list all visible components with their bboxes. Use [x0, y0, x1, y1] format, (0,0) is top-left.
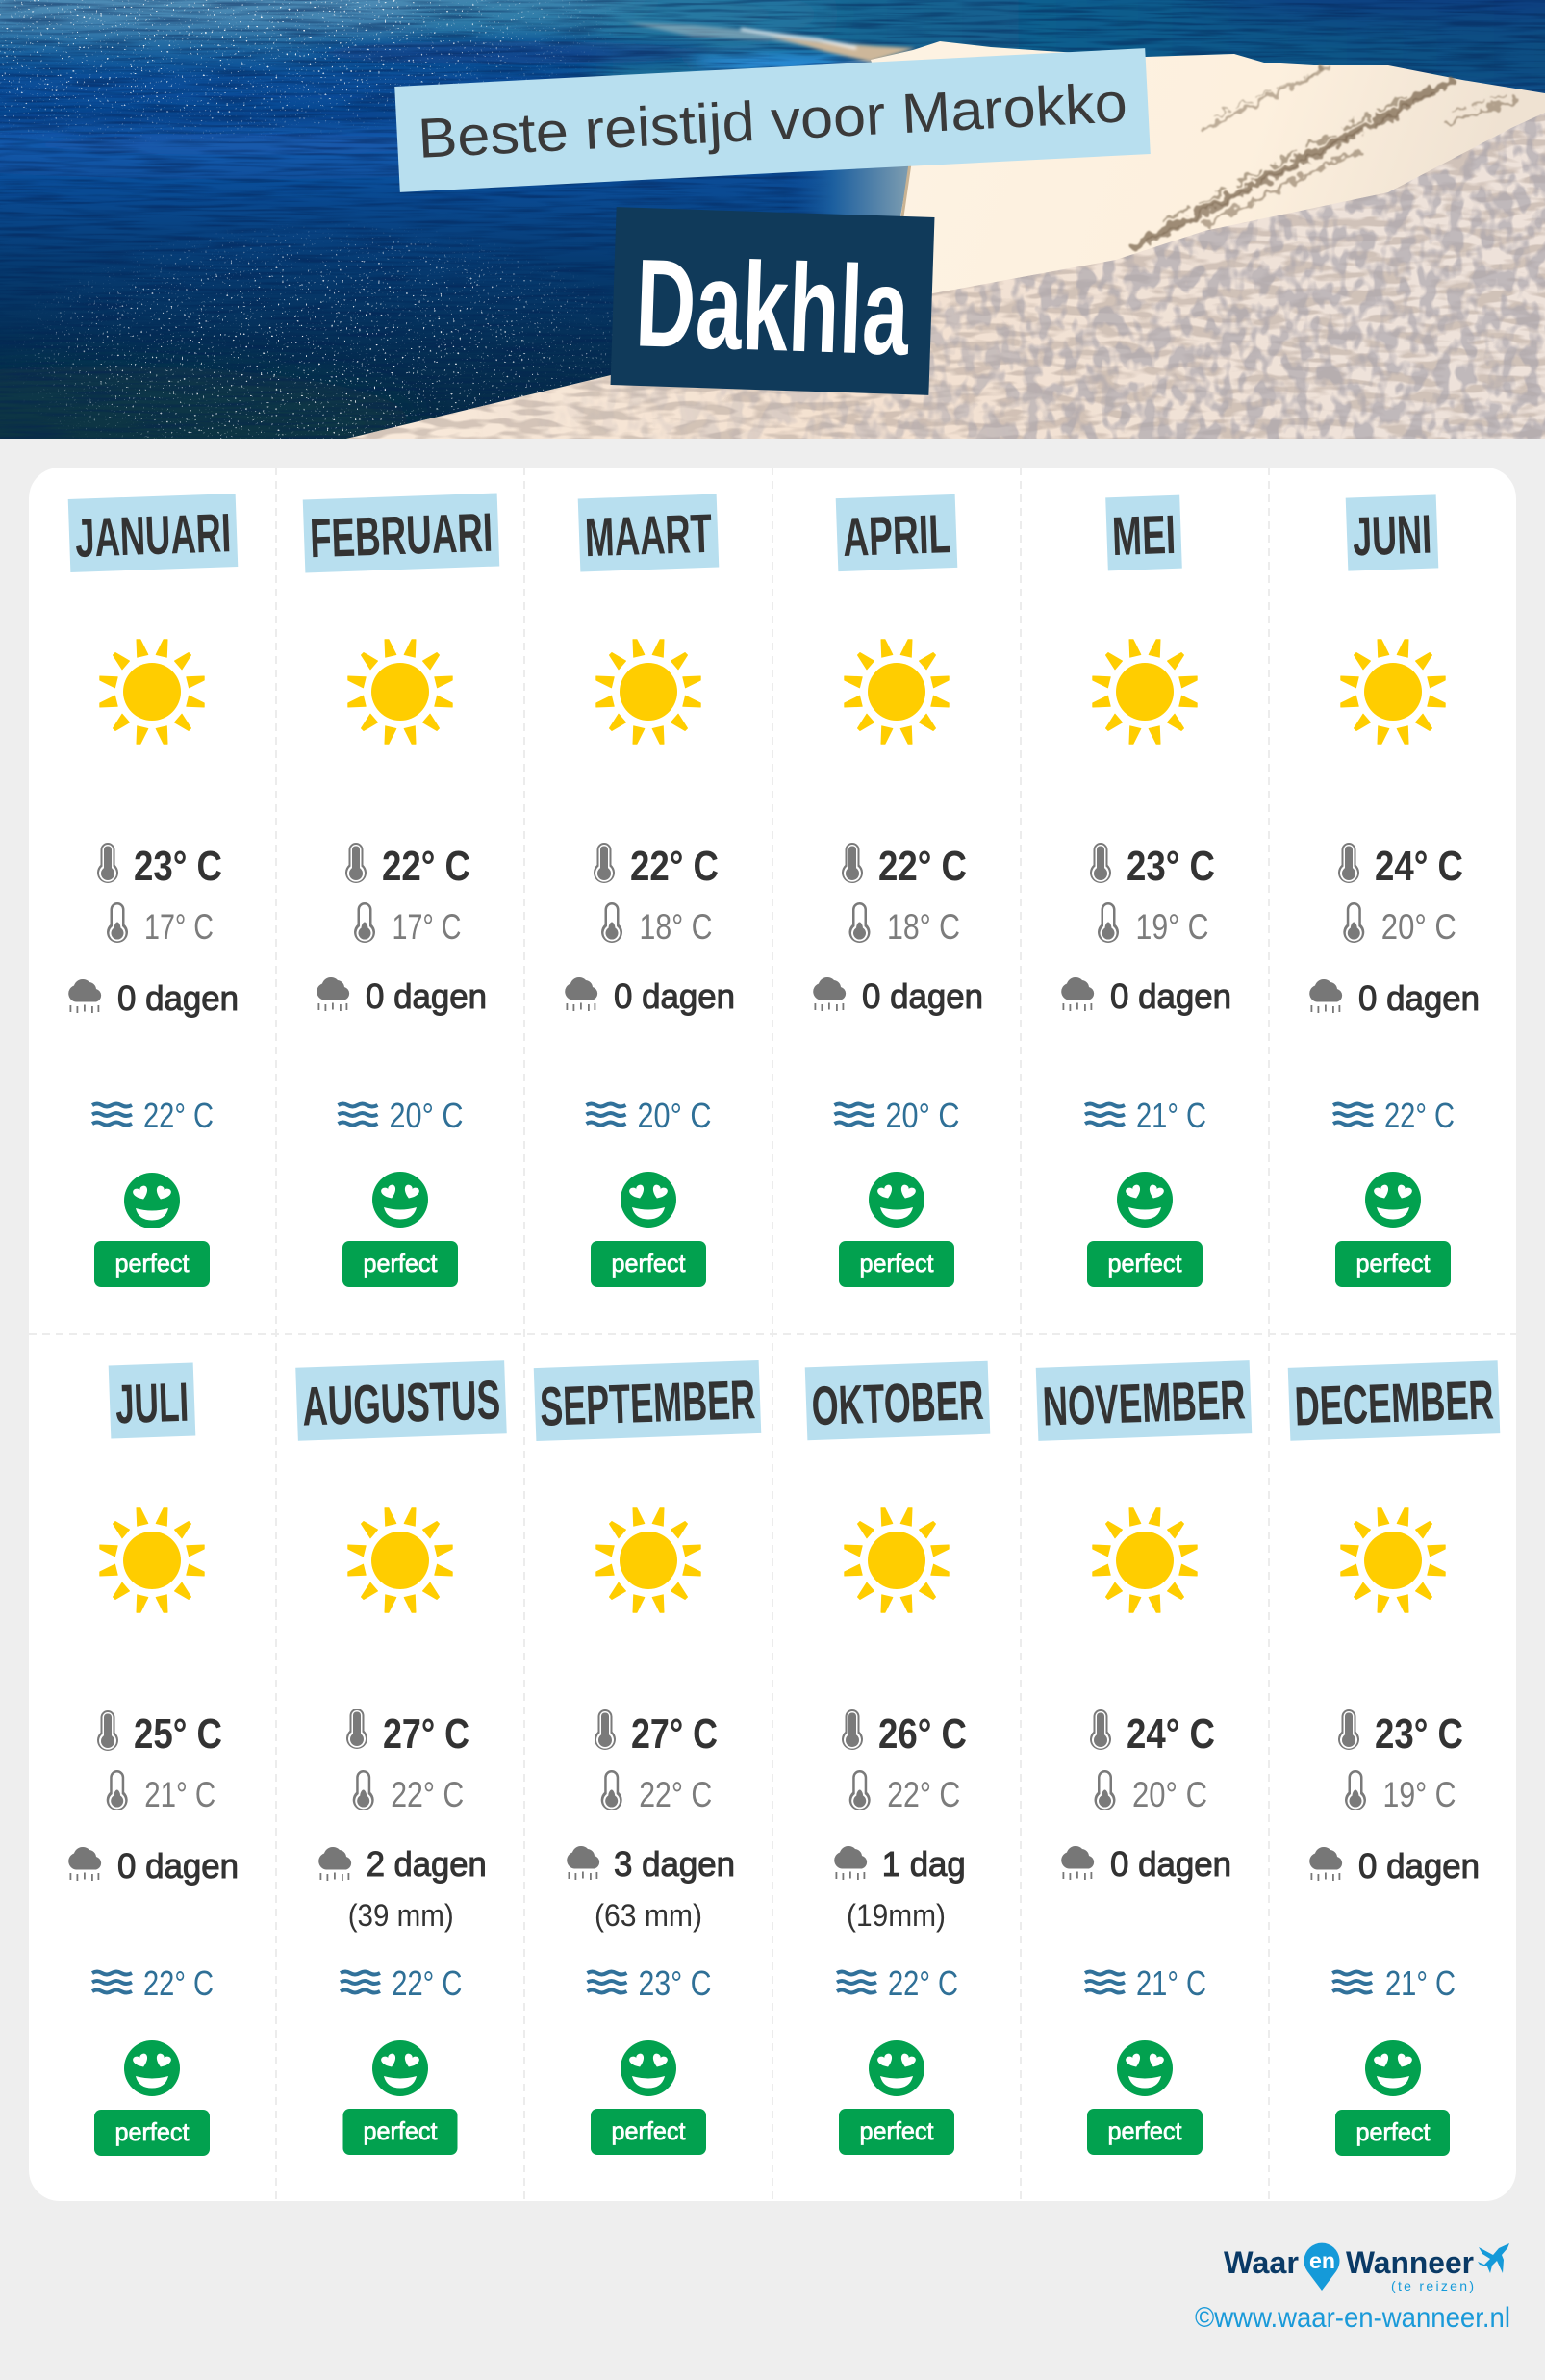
icon: sea water — [92, 1972, 132, 1993]
max temperature: 22° C — [382, 843, 470, 890]
sea temperature: 22° C — [1384, 1096, 1455, 1135]
min temperature: 18° C — [639, 907, 712, 947]
rating badge: perfect — [860, 1249, 934, 1278]
icon: min temperature — [1343, 902, 1364, 943]
rain days: 1 dag — [882, 1844, 966, 1884]
icon: rain — [68, 1847, 101, 1881]
icon: min temperature — [1095, 1770, 1116, 1810]
icon: rain — [1061, 977, 1094, 1011]
logo word: en: en — [1309, 2248, 1335, 2273]
max temperature: 25° C — [134, 1710, 222, 1758]
rain days: 0 dagen — [117, 1846, 239, 1886]
month: november — [1036, 1360, 1252, 2155]
icon: min temperature — [848, 902, 870, 943]
logo word: Wanneer: Wanneer — [1346, 2245, 1474, 2280]
month label: MEI — [1111, 504, 1177, 568]
city title: Dakhla: Dakhla — [633, 232, 912, 382]
rainfall amount: (39 mm) — [348, 1898, 454, 1933]
icon: smiley — [869, 2040, 924, 2096]
min temperature: 22° C — [887, 1775, 960, 1814]
icon: max temperature — [842, 843, 863, 883]
month: maart — [565, 494, 735, 1287]
rating badge: perfect — [1356, 2117, 1431, 2146]
month label: JULI — [114, 1372, 190, 1435]
icon: smiley — [372, 2040, 428, 2096]
rating badge — [94, 1241, 210, 1287]
sea temperature: 23° C — [639, 1963, 712, 2003]
month label — [805, 1361, 990, 1440]
icon: smiley — [621, 1172, 676, 1228]
icon: map pin — [1304, 2243, 1340, 2291]
month: juli — [68, 1362, 239, 2156]
hero photo: sea and sand dune — [0, 0, 1545, 481]
rain days: 0 dagen — [117, 978, 239, 1018]
icon: sun — [596, 1508, 700, 1612]
icon: max temperature — [842, 1709, 863, 1750]
month label: OKTOBER — [811, 1370, 985, 1437]
sea temperature: 22° C — [888, 1963, 958, 2003]
icon: sea water — [587, 1972, 627, 1993]
rating badge: perfect — [115, 2117, 190, 2146]
icon: max temperature — [594, 843, 615, 883]
rating badge — [1335, 1241, 1451, 1287]
icon: smiley — [1117, 1172, 1173, 1228]
rating badge — [94, 2110, 210, 2156]
month label — [68, 494, 238, 572]
panel: monthly climate card — [29, 468, 1516, 2201]
sea temperature: 20° C — [885, 1096, 960, 1135]
icon: max temperature — [1338, 1709, 1359, 1750]
icon: max temperature — [97, 843, 118, 883]
icon: rain — [834, 1846, 867, 1880]
month label: JUNI — [1352, 504, 1432, 568]
rating badge — [342, 2109, 458, 2155]
month label — [109, 1362, 195, 1439]
icon: sea water — [1085, 1104, 1125, 1126]
month: december — [1288, 1360, 1500, 2156]
rating badge: perfect — [612, 2116, 686, 2145]
month label: AUGUSTUS — [301, 1369, 501, 1438]
month: mei — [1061, 495, 1231, 1287]
month label — [578, 494, 719, 571]
icon: sun — [100, 640, 204, 744]
icon: min temperature — [601, 1770, 622, 1810]
icon: sun — [348, 640, 452, 744]
icon: sea water — [587, 1104, 625, 1126]
icon: rain — [565, 977, 597, 1011]
rating badge — [839, 1241, 954, 1287]
rating badge — [342, 1241, 458, 1287]
rating badge: perfect — [1356, 1249, 1431, 1278]
icon: sun — [1341, 1508, 1445, 1612]
max temperature: 22° C — [878, 843, 967, 890]
month: oktober — [805, 1361, 990, 2155]
month label: JANUARI — [74, 502, 232, 570]
icon: sea water — [92, 1104, 132, 1126]
rating badge: perfect — [860, 2116, 934, 2145]
icon: rain — [567, 1846, 599, 1880]
rain days: 2 dagen — [367, 1844, 487, 1884]
month label: FEBRUARI — [309, 502, 494, 570]
icon: rain — [318, 1847, 351, 1881]
icon: min temperature — [107, 902, 128, 943]
icon: rain — [813, 977, 846, 1011]
sea temperature: 22° C — [143, 1963, 214, 2003]
city title: Dakhla — [611, 207, 934, 395]
min temperature: 21° C — [144, 1775, 215, 1814]
logo tagline: (te reizen) — [1391, 2278, 1474, 2293]
rating badge: perfect — [1108, 2116, 1182, 2145]
month label: NOVEMBER — [1042, 1369, 1247, 1438]
website credit: ©www.waar-en-wanneer.nl — [1195, 2302, 1510, 2334]
sea temperature: 21° C — [1136, 1963, 1206, 2003]
min temperature: 19° C — [1383, 1775, 1456, 1814]
icon: sun — [1093, 640, 1197, 744]
rainfall amount: (63 mm) — [595, 1898, 702, 1933]
rain days: 0 dagen — [1358, 978, 1480, 1018]
icon: max temperature — [1338, 843, 1359, 883]
icon: min temperature — [849, 1770, 871, 1810]
rating badge — [1335, 2110, 1450, 2156]
month: februari — [303, 493, 499, 1287]
icon: sea water — [1085, 1972, 1125, 1993]
icon: max temperature — [97, 1710, 118, 1751]
icon: sun — [100, 1508, 204, 1612]
month label: SEPTEMBER — [539, 1369, 756, 1438]
icon: max temperature — [345, 843, 367, 883]
icon: smiley — [372, 1172, 428, 1228]
min temperature: 17° C — [144, 907, 214, 947]
rain days: 0 dagen — [366, 976, 487, 1016]
month label — [534, 1360, 761, 1441]
rainfall amount: (19mm) — [847, 1898, 946, 1933]
month: januari — [68, 494, 239, 1287]
icon: rain — [1309, 1847, 1342, 1881]
rating badge — [839, 2109, 954, 2155]
month: april — [813, 494, 983, 1287]
sea temperature: 21° C — [1385, 1963, 1456, 2003]
icon: min temperature — [601, 902, 622, 943]
month label — [1036, 1360, 1252, 1441]
icon: sun — [348, 1508, 452, 1612]
logo: Waar en Wanneer — [1224, 2243, 1509, 2293]
max temperature: 23° C — [134, 843, 222, 890]
rating badge — [591, 1241, 706, 1287]
icon: smiley — [124, 2040, 180, 2096]
icon: rain — [1309, 979, 1342, 1013]
min temperature: 22° C — [391, 1775, 464, 1814]
month: september — [534, 1360, 761, 2155]
title banner: Beste reistijd voor Marokko: Beste reistijd voor Marokko — [417, 71, 1128, 170]
icon: smiley — [1365, 2040, 1421, 2096]
icon: sun — [845, 640, 949, 744]
rating badge — [591, 2109, 706, 2155]
icon: sea water — [1333, 1104, 1373, 1126]
icon: max temperature — [346, 1709, 367, 1749]
max temperature: 24° C — [1127, 1710, 1215, 1758]
icon: smiley — [1117, 2040, 1173, 2096]
icon: max temperature — [595, 1709, 616, 1750]
sea temperature: 20° C — [637, 1096, 712, 1135]
icon: rain — [1061, 1846, 1094, 1880]
logo word: Waar: Waar — [1224, 2245, 1299, 2280]
icon: smiley — [869, 1172, 924, 1228]
month label: MAART — [584, 503, 713, 569]
rating badge: perfect — [364, 2116, 438, 2145]
icon: smiley — [1365, 1172, 1421, 1228]
icon: min temperature — [1345, 1770, 1366, 1810]
rating badge — [1087, 2109, 1203, 2155]
rain days: 0 dagen — [1358, 1846, 1480, 1886]
icon: min temperature — [1098, 902, 1119, 943]
max temperature: 26° C — [878, 1710, 967, 1758]
icon: sea water — [1332, 1972, 1372, 1993]
rain days: 0 dagen — [1110, 1844, 1231, 1884]
sea temperature: 22° C — [143, 1096, 214, 1135]
icon: max temperature — [1090, 843, 1111, 883]
title banner: Beste reistijd voor Marokko — [394, 48, 1151, 192]
icon: rain — [68, 979, 101, 1013]
icon: smiley — [124, 1173, 180, 1228]
icon: sun — [1341, 640, 1445, 744]
month label — [295, 1360, 507, 1441]
max temperature: 27° C — [383, 1710, 469, 1758]
rating badge: perfect — [1108, 1249, 1182, 1278]
max temperature: 23° C — [1127, 843, 1215, 890]
icon: sea water — [339, 1104, 377, 1126]
month label: APRIL — [842, 503, 951, 569]
rating badge: perfect — [612, 1249, 686, 1278]
max temperature: 22° C — [630, 843, 719, 890]
month label — [303, 493, 499, 573]
icon: sea water — [341, 1972, 380, 1993]
month label — [1105, 495, 1182, 570]
rain days: 3 dagen — [614, 1844, 735, 1884]
icon: min temperature — [107, 1770, 128, 1810]
rain days: 0 dagen — [862, 976, 983, 1016]
min temperature: 17° C — [393, 907, 462, 947]
icon: rain — [317, 977, 349, 1011]
icon: airplane — [1478, 2243, 1509, 2273]
icon: sun — [845, 1508, 949, 1612]
icon: sun — [596, 640, 700, 744]
min temperature: 18° C — [887, 907, 960, 947]
min temperature: 19° C — [1135, 907, 1208, 947]
rain days: 0 dagen — [614, 976, 735, 1016]
min temperature: 22° C — [639, 1775, 712, 1814]
icon: min temperature — [354, 902, 375, 943]
icon: sea water — [837, 1972, 876, 1993]
rating badge — [1087, 1241, 1203, 1287]
max temperature: 27° C — [631, 1710, 718, 1758]
icon: min temperature — [353, 1770, 374, 1810]
icon: max temperature — [1090, 1709, 1111, 1750]
min temperature: 20° C — [1132, 1775, 1207, 1814]
max temperature: 23° C — [1375, 1710, 1463, 1758]
sea temperature: 20° C — [389, 1096, 464, 1135]
month: juni — [1309, 494, 1480, 1287]
month label — [1346, 494, 1438, 571]
max temperature: 24° C — [1375, 843, 1463, 890]
icon: sun — [1093, 1508, 1197, 1612]
rain days: 0 dagen — [1110, 976, 1231, 1016]
icon: smiley — [621, 2040, 676, 2096]
rating badge: perfect — [364, 1249, 438, 1278]
month: augustus — [295, 1360, 507, 2155]
sea temperature: 22° C — [392, 1963, 462, 2003]
min temperature: 20° C — [1381, 907, 1456, 947]
rating badge: perfect — [115, 1249, 190, 1278]
sea temperature: 21° C — [1136, 1096, 1206, 1135]
month label — [836, 494, 957, 571]
icon: sea water — [835, 1104, 874, 1126]
